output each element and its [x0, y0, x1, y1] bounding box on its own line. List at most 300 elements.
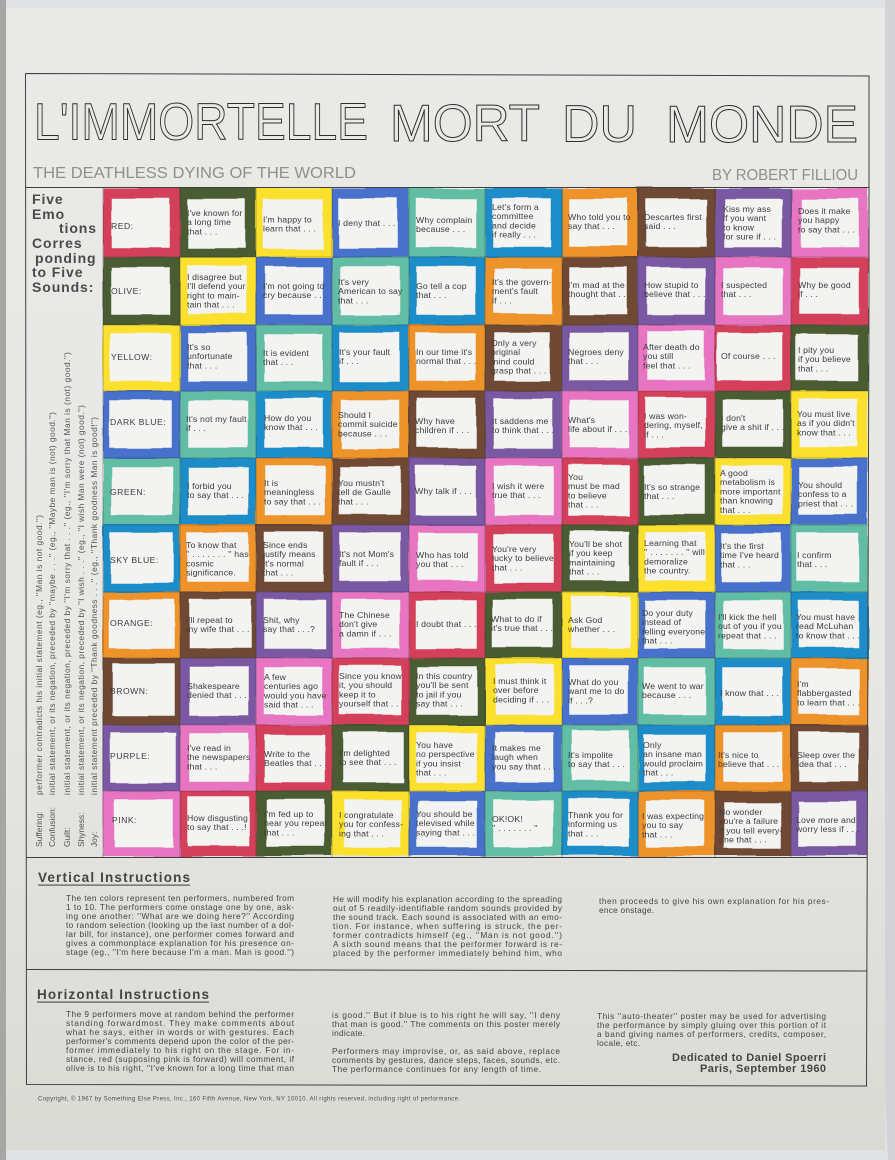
- cell: To know that: [180, 525, 256, 592]
- cell: I wish it were: I wish it were: [492, 481, 544, 491]
- text: horizontal instructions column 1: olive is to his right, ''I've known for a long time that man: [66, 1063, 294, 1073]
- text: vertical instructions column 1: lar bill, for instance), one performer comes forward and: [66, 929, 294, 939]
- row 4: dark blue: [103, 391, 868, 458]
- cell: Go tell a cop: that . . .: [416, 290, 446, 300]
- text: horizontal instructions column 2: The performance continues for any length of time.: [332, 1064, 541, 1074]
- row 9: purple: [103, 725, 868, 791]
- cell: I disagree but: I'll defend your: [187, 281, 246, 291]
- backdrop: left shadow edge: [0, 0, 6, 1160]
- cell: OK! OK!: '' . . . . . . . '': [492, 823, 538, 833]
- cell: A good metabolism: A good: [720, 468, 748, 478]
- cell: What do you: [562, 658, 638, 725]
- cell: Write to the Beatles: Beatles that . . .: [264, 758, 327, 768]
- cell: It's not my fault: if . . .: [186, 423, 206, 433]
- text: vertical instructions column 3: ence onstage.: [599, 905, 654, 915]
- cell: It's so unfortunate: unfortunate: [187, 351, 233, 361]
- cell: DARK BLUE: [103, 391, 180, 458]
- row 2: olive: [103, 257, 868, 325]
- cell: I disagree but: tain that . . .: [187, 300, 235, 310]
- cell: After death do: After death do: [643, 342, 700, 352]
- cell: I've known for: I've known for: [187, 208, 242, 218]
- cell: Who has told: [409, 525, 485, 592]
- heading: five emotions: Corres: [32, 235, 83, 251]
- cell: I'm flabbergasted: to learn that . . .: [797, 697, 860, 707]
- rotated list: emotions and statements: [34, 352, 99, 847]
- cell: You must live: know that . . .: [797, 427, 851, 437]
- cell: Why have children: children if . . .: [415, 425, 469, 435]
- cell: You have no perspective: that . . .: [416, 768, 446, 778]
- cell: I'm flabbergasted: I'm: [797, 679, 809, 689]
- cell: Kiss my ass: if you want: [723, 213, 767, 223]
- cell: In this country: you'll be sent: [416, 680, 469, 690]
- cell: It saddens me: to think that . . .: [492, 425, 554, 435]
- cell: I congratulate: [332, 791, 409, 856]
- text: horizontal instructions column 2: is good.'' But if blue is to his right he will say, ''I deny: [332, 1010, 561, 1020]
- cell: What's life about: life about if . . .: [568, 424, 627, 434]
- cell: You'll be shot: maintaining: [569, 557, 615, 567]
- row 3: yellow: [103, 325, 868, 391]
- cell: It's very American: American to say: [338, 286, 403, 296]
- cell: It saddens me: [485, 391, 562, 458]
- cell: I've read in: [180, 725, 256, 791]
- cell: I congratulate: ing that . . .: [339, 828, 384, 838]
- cell: You have no perspective: You have: [416, 740, 453, 750]
- rotated list: emotions and statements: initial statement, or its negation, preceded by ''maybe . . .'' (eg., ''Maybe man is (not) good.''): [47, 412, 57, 795]
- cell: No wonder: you're a failure: [719, 816, 778, 826]
- cell: I'm fed up to: hear you repeat: [264, 818, 328, 828]
- author credit: BY ROBERT FILLIOU: [712, 167, 858, 184]
- cell: You must be mad: [562, 458, 638, 525]
- cell: I'll kick the hell: repeat that . . .: [718, 630, 777, 640]
- cell: Do your duty: telling everyone: [642, 626, 705, 636]
- cell: Let's form a committee: if really . . .: [492, 230, 536, 240]
- cell: Only an insane man: an insane man: [643, 749, 702, 759]
- cell: Kiss my ass: to know: [723, 222, 755, 232]
- cell: You must have: to know that . . .: [796, 630, 860, 640]
- row 8: brown: [103, 658, 868, 725]
- cell: Kiss my ass: Kiss my ass: [723, 204, 771, 214]
- cell: PINK: [103, 791, 180, 856]
- cell: Love more and: worry less if . . .: [795, 824, 859, 834]
- cell: It's not my fault: [180, 391, 256, 458]
- cell: You must live: [791, 391, 868, 458]
- rotated list: emotions and statements: Joy:: [89, 832, 99, 847]
- cell: ORANGE: [103, 592, 180, 658]
- cell: It's very American: that . . .: [338, 295, 368, 305]
- cell: It's nice to: [715, 725, 791, 791]
- cell: I forbid you: I forbid you: [187, 481, 232, 491]
- cell: I've known for: a long time: [187, 217, 231, 227]
- cell: Shit, why: Shit, why: [263, 615, 300, 625]
- cell: I'll kick the hell: out of you if you: [718, 621, 782, 631]
- cell: We went to war: [638, 658, 715, 725]
- cell: I'm mad at the: [562, 257, 638, 325]
- cell: Learning that: '' . . . . . . . '' will: [644, 547, 705, 557]
- cell: Descartes first: [638, 188, 715, 257]
- cell: What do you: if . . .?: [568, 695, 593, 705]
- copyright line: Copyright, © 1967 by Something Else Press, Inc., 160 Fifth Avenue, New York, NY 10010. All rights reserved, including right of performance.: [38, 1096, 460, 1102]
- cell: YELLOW: YELLOW:: [111, 352, 153, 362]
- cell: It saddens me: It saddens me: [492, 416, 549, 426]
- cell: I'm happy to: [256, 188, 332, 257]
- cell: PINK: PINK:: [112, 815, 137, 825]
- cell: It's your fault: [332, 325, 409, 391]
- cell: You must be mad: to believe: [568, 490, 607, 500]
- dedication: [672, 1052, 826, 1075]
- cell: I was expecting: [638, 791, 715, 856]
- cell: Who has told: you that . . .: [416, 559, 464, 569]
- heading: five emotions: tions: [59, 220, 97, 236]
- cell: GREEN: GREEN:: [110, 487, 146, 497]
- cell: I don't give a shit: I don't: [721, 413, 746, 423]
- cell: Why be good: Why be good: [798, 280, 851, 290]
- cell: OLIVE: OLIVE:: [111, 286, 142, 296]
- cell: I've known for: that . . .: [187, 226, 217, 236]
- row 5: green: [103, 458, 868, 525]
- cell: A few centuries ago: centuries ago: [264, 681, 318, 691]
- cell: You'll be shot: if you keep: [569, 548, 613, 558]
- cell: It's the govern-: It's the govern-: [492, 277, 552, 287]
- cell: You must be mad: You: [568, 472, 583, 482]
- dedication: Dedicated to Daniel Spoerri: [672, 1052, 826, 1064]
- text: vertical instructions column 1: to random selection (looking up the last number of a dol-: [66, 920, 294, 930]
- text: vertical instructions column 3: [599, 896, 829, 915]
- cell: Write to the Beatles: [256, 725, 332, 791]
- cell: I deny that: I deny that . . .: [338, 218, 396, 228]
- cell: I wish it were: [485, 458, 562, 525]
- cell: In this country: to jail if you: [416, 689, 462, 699]
- cell: You must be mad: must be mad: [568, 481, 620, 491]
- title: DU: [562, 96, 637, 154]
- cell: Since you know: Since you know: [339, 671, 403, 681]
- cell: Do your duty: instead of: [642, 617, 682, 627]
- cell: Love more and: [791, 791, 868, 856]
- cell: How do you: How do you: [264, 413, 311, 423]
- cell: In our time: [409, 325, 485, 391]
- cell: You'll be shot: that . . .: [569, 567, 599, 577]
- cell: You must have: You must have: [796, 612, 855, 622]
- cell: SKY BLUE: SKY BLUE:: [110, 555, 159, 565]
- cell: I doubt that: [409, 592, 485, 658]
- rotated list: emotions and statements: performer contradicts his initial statement (eg., ''Man is not good.''): [34, 515, 44, 795]
- cell: I pity you: [791, 325, 868, 391]
- cell: Who told you to: say that . . .: [568, 221, 615, 231]
- cell: You must have: read McLuhan: [796, 621, 853, 631]
- cell: Only a very original: Only a very: [491, 338, 537, 348]
- cell: I'm delighted: to see that . . .: [339, 757, 397, 767]
- text: horizontal instructions column 3: This ''auto-theater'' poster may be used for advertising: [597, 1011, 826, 1021]
- text: vertical instructions column 1: stage (eg., ''I'm here because I'm a man. Man is good.''): [66, 947, 294, 957]
- cell: It's the govern-: if . . .: [492, 295, 512, 305]
- cell: I've known for: [180, 188, 256, 257]
- cell: You must have: [791, 592, 868, 658]
- cell: Shakespeare denied: denied that . . .: [187, 690, 247, 700]
- cell: You should confess: confess to a: [798, 489, 847, 499]
- cell: Should I commit suicide: Should I: [338, 410, 371, 420]
- cell: What do you: want me to do: [567, 686, 625, 696]
- cell: Do your duty: Do your duty: [642, 608, 694, 618]
- cell: In this country: [409, 658, 485, 725]
- cell: Thank you for: that . . .: [568, 828, 598, 838]
- cell: It's the first time: It's the first: [720, 541, 764, 551]
- cell: How stupid to: [638, 257, 715, 325]
- cell: How disgusting: [180, 791, 256, 856]
- text: horizontal instructions column 1: performer's comments depend upon the color of the per-: [66, 1036, 294, 1046]
- cell: Since you know: keep it to: [339, 689, 376, 699]
- cell: You should be televised: [409, 791, 485, 856]
- rotated list: emotions and statements: Guilt:: [62, 827, 72, 847]
- cell: I've read in: the newspapers: [187, 752, 251, 762]
- cell: Thank you for: Thank you for: [568, 810, 623, 820]
- cell: Should I commit suicide: [332, 391, 409, 458]
- cell: BROWN: BROWN:: [110, 686, 148, 696]
- cell: How do you: know that . . .: [264, 422, 318, 432]
- cell: It's so strange: that . . .: [644, 491, 674, 501]
- cell: I'll repeat to: I'll repeat to: [186, 615, 233, 625]
- cell: It's impolite: to say that . . .: [568, 759, 625, 769]
- text: vertical instructions column 2: He will modify his explanation according to the spreading: [333, 894, 562, 904]
- cell: I pity you: if you believe: [798, 354, 851, 364]
- cell: You must live: as if you didn't: [797, 418, 855, 428]
- cell: I'm mad at the: I'm mad at the: [568, 280, 625, 290]
- title: L'IMMORTELLE: [34, 94, 368, 152]
- cell: You should be televised: saying that . . .: [416, 827, 475, 837]
- cell: I was expecting: you to say: [642, 820, 684, 830]
- text: horizontal instructions column 2: Performers may improvise, or, as said above, replace: [332, 1046, 560, 1056]
- cell: Sleep over the: Sleep over the: [797, 750, 855, 760]
- cell: Kiss my ass: for sure if . . .: [723, 232, 776, 242]
- rotated list: emotions and statements: Suffering:: [34, 811, 44, 847]
- cell: You should confess: You should: [798, 480, 842, 490]
- cell: I must think it: over before: [493, 685, 539, 695]
- cell: To know that: cosmic: [186, 558, 214, 568]
- rotated list: emotions and statements: Confusion:: [47, 807, 57, 847]
- cell: It's the govern-: ment's fault: [492, 286, 538, 296]
- cell: You must live: You must live: [797, 409, 850, 419]
- cell: It is evident: that . . .: [263, 357, 293, 367]
- cell: I know that: [715, 658, 791, 725]
- cell: I don't give a shit: give a shit if . . .: [721, 422, 784, 432]
- cell: Negroes deny: [562, 325, 638, 391]
- cell: Descartes first: said . . .: [644, 221, 676, 231]
- cell: Only an insane man: would proclaim: [642, 758, 703, 768]
- cell: RED: [103, 188, 180, 257]
- cell: What's life about: [562, 391, 638, 458]
- cell: I disagree but: [180, 257, 256, 325]
- text: horizontal instructions column 1: The 9 performers move at random behind the performer: [66, 1009, 294, 1019]
- cell: Of course: Of course . . .: [721, 351, 775, 361]
- cell: Does it make: [791, 188, 868, 257]
- cell: I congratulate: I congratulate: [339, 810, 394, 820]
- cell: I confirm: [791, 525, 868, 592]
- cell: A good metabolism: than knowing: [720, 496, 773, 506]
- cell: Why have children: [409, 391, 485, 458]
- cell: Only an insane man: [638, 725, 715, 791]
- cell: It's the first time: that . . .: [720, 559, 750, 569]
- text: vertical instructions column 2: placed by the performer immediately behind him, who: [333, 948, 562, 958]
- cell: Should I commit suicide: because . . .: [338, 428, 387, 438]
- text: horizontal instructions column 2: comments by gestures, dance steps, faces, sounds, etc.: [332, 1055, 560, 1065]
- cell: You mustn't: [332, 458, 409, 525]
- cell: To know that: '' . . . . . . . '' has: [186, 549, 249, 559]
- cell: You'll be shot: You'll be shot: [569, 539, 623, 549]
- text: vertical instructions column 1: [66, 893, 294, 957]
- cell: Learning that: demoralize: [644, 556, 688, 566]
- cell: Only an insane man: that . . .: [643, 768, 673, 778]
- cell: No wonder: if you tell every-: [719, 825, 783, 835]
- cell: No wonder: No wonder: [719, 807, 762, 817]
- cell: It's so unfortunate: [180, 325, 256, 391]
- cell: It's not Mom's: It's not Mom's: [339, 549, 395, 559]
- cell: It's very American: [332, 257, 409, 325]
- cell: Negroes deny: Negroes deny: [568, 347, 624, 357]
- cell: GREEN: [103, 458, 180, 525]
- cell: It's nice to: believe that . . .: [718, 759, 780, 769]
- cell: It makes me: [485, 725, 562, 791]
- cell: I'm fed up to: [256, 791, 332, 856]
- cell: I'm delighted: [332, 725, 409, 791]
- cell: The Chinese: [332, 592, 409, 658]
- cell: I'm happy to: I'm happy to: [263, 214, 312, 224]
- cell: I'll kick the hell: [715, 592, 791, 658]
- cell: The Chinese: a damn if . . .: [339, 628, 391, 638]
- text: horizontal instructions column 2: [332, 1010, 561, 1074]
- cell: It's the first time: [715, 525, 791, 592]
- cell: I'm not going to: cry because . . .: [263, 290, 327, 300]
- cell: We went to war: because . . .: [642, 690, 691, 700]
- dedication: Paris, September 1960: [700, 1063, 826, 1075]
- cell: Only a very original: [485, 325, 562, 391]
- cell: To know that: significance.: [186, 568, 236, 578]
- cell: Only a very original: original: [491, 347, 520, 357]
- cell: I confirm: I confirm: [797, 550, 832, 560]
- cell: A good metabolism: metabolism is: [720, 477, 776, 487]
- cell: Shit, why: say that . . .?: [263, 624, 315, 634]
- cell: Go tell a cop: [409, 257, 485, 325]
- cell: Thank you for: [562, 791, 638, 856]
- cell: No wonder: [715, 791, 791, 856]
- cell: Ask God: Ask God: [568, 615, 602, 625]
- row 7: orange: [103, 592, 868, 658]
- cell: Kiss my ass: [715, 188, 791, 257]
- cell: SKY BLUE: [103, 525, 180, 592]
- cell: It's not Mom's: fault if . . .: [339, 558, 379, 568]
- cell: I'll repeat to: my wife that . . .: [186, 624, 250, 634]
- cell: You're very lucky: that . . .: [492, 562, 522, 572]
- cell: How stupid to: believe that . . .: [644, 289, 706, 299]
- cell: I forbid you: to say that . . .: [187, 490, 244, 500]
- title: [34, 94, 858, 154]
- cell: You must be mad: that . . .: [568, 500, 598, 510]
- cell: Who told you to: Who told you to: [568, 212, 631, 222]
- cell: You're very lucky: lucky to believe: [492, 553, 554, 563]
- text: horizontal instructions column 1: former immediately to his right on the stage. For in-: [66, 1045, 294, 1055]
- heading: five emotions: ponding: [35, 250, 97, 266]
- cell: Learning that: Learning that: [644, 538, 697, 548]
- heading: five emotions: Five: [32, 191, 64, 207]
- cell: Why talk if: Why talk if . . .: [415, 486, 472, 496]
- cell: I was wondering: [638, 391, 715, 458]
- cell: I'm not going to: I'm not going to: [263, 281, 325, 291]
- cell: What to do if: [485, 592, 562, 658]
- cell: I've read in: I've read in: [187, 743, 231, 753]
- cell: It's very American: It's very: [338, 277, 370, 287]
- cell: I'll kick the hell: I'll kick the hell: [718, 612, 776, 622]
- cell: I'm fed up to: I'm fed up to: [264, 809, 314, 819]
- cell: I know that: I know that . . .: [720, 688, 779, 698]
- cell: How stupid to: How stupid to: [644, 280, 699, 290]
- cell: Why have children: Why have: [415, 416, 455, 426]
- text: vertical instructions column 1: The ten colors represent ten performers, numbered from: [66, 893, 294, 903]
- cell: It's impolite: It's impolite: [568, 750, 613, 760]
- text: vertical instructions column 2: [333, 894, 563, 958]
- cell: It is evident: It is evident: [263, 348, 309, 358]
- text: horizontal instructions column 1: standing forwardmost. They make comments about: [66, 1018, 295, 1028]
- cell: Since you know: it, you should: [339, 680, 392, 690]
- cell: I forbid you: [180, 458, 256, 525]
- text: horizontal instructions column 3: the performance by simply gluing over this portion of it: [597, 1020, 827, 1030]
- cell: YELLOW: [103, 325, 180, 391]
- cell: Does it make: you happy: [798, 215, 840, 225]
- cell: In this country: In this country: [416, 671, 473, 681]
- cell: To know that: To know that: [186, 540, 237, 550]
- cell: Since you know: yourself that . . .: [339, 699, 404, 709]
- cell: Only a very original: mind could: [491, 356, 535, 366]
- cell: I'm fed up to: that . . .: [264, 827, 294, 837]
- cell: I suspected: I suspected: [721, 280, 767, 290]
- cell: You have no perspective: no perspective: [416, 749, 475, 759]
- cell: PURPLE: [103, 725, 180, 791]
- text: vertical instructions column 2: the sound track. Each sound is associated with an emo-: [333, 912, 562, 922]
- cell: It is evident: [256, 325, 332, 391]
- cell: OK! OK!: [485, 791, 562, 856]
- cell: I must think it: [485, 658, 562, 725]
- cell: Shit, why: [256, 592, 332, 658]
- cell: It's so strange: It's so strange: [644, 482, 700, 492]
- cell: ORANGE: ORANGE:: [110, 618, 153, 628]
- cell: Do your duty: [638, 592, 715, 658]
- cell: Does it make: to say that . . .: [798, 224, 855, 234]
- cell: I was wondering: dering, myself,: [644, 420, 703, 430]
- cell: Only an insane man: Only: [643, 740, 662, 750]
- cell: Let's form a committee: [485, 188, 562, 257]
- cell: Why be good: [791, 257, 868, 325]
- cell: Let's form a committee: committee: [492, 211, 533, 221]
- row 1: red: [103, 188, 868, 257]
- cell: The Chinese: The Chinese: [339, 610, 390, 620]
- text: horizontal instructions column 3: locale, etc.: [597, 1038, 640, 1048]
- cell: You should confess: [791, 458, 868, 525]
- cell: Why talk if: [409, 458, 485, 525]
- cell: Who told you to: [562, 188, 638, 257]
- cell: Shakespeare denied: [180, 658, 256, 725]
- cell: Ask God: whether . . .: [567, 624, 615, 634]
- cell: I wish it were: true that . . .: [492, 490, 541, 500]
- cell: It's the first time: time I've heard: [720, 550, 779, 560]
- cell: Since ends justify: it's normal: [263, 558, 304, 568]
- row 6: sky blue: [103, 525, 868, 592]
- cell: You'll be shot: [562, 525, 638, 592]
- cell: It makes me: laugh when: [492, 752, 538, 762]
- cell: Why complain: because . . .: [416, 224, 465, 234]
- cell: What's life about: What's: [568, 415, 596, 425]
- cell: Since ends justify: [256, 525, 332, 592]
- cell: I congratulate: you for confess-: [339, 819, 403, 829]
- cell: Descartes first: Descartes first: [644, 212, 702, 222]
- cell: Since ends justify: that . . .: [263, 568, 293, 578]
- cell: I disagree but: I disagree but: [187, 272, 242, 282]
- cell: Who has told: Who has told: [416, 550, 469, 560]
